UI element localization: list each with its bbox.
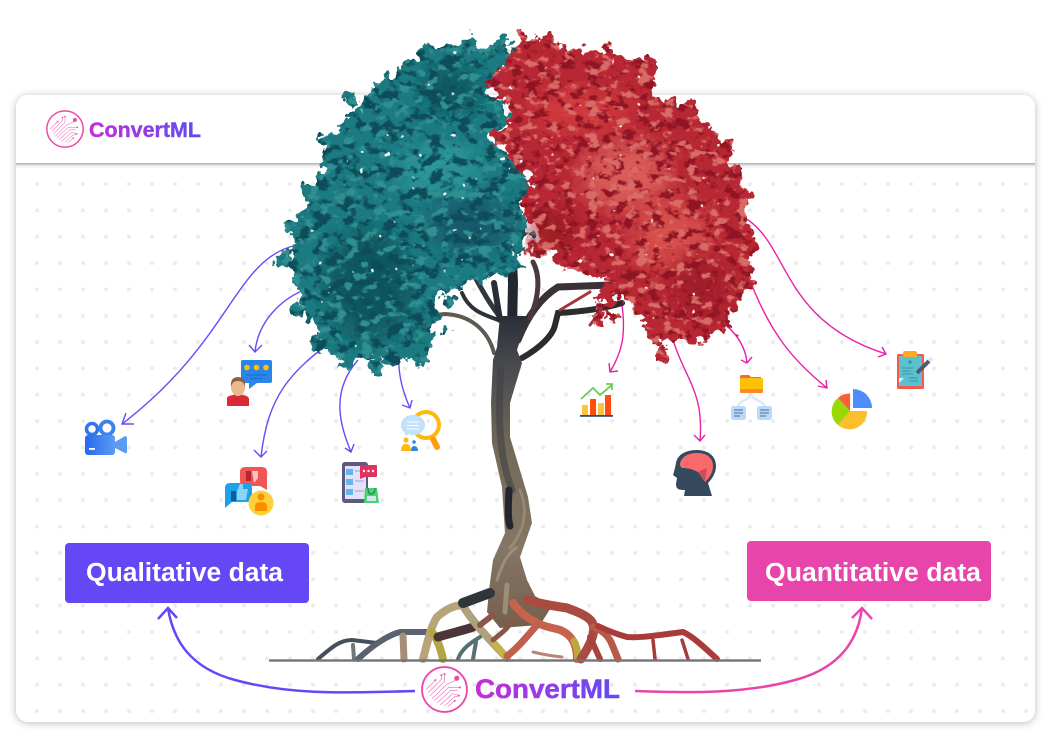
icon: folder tree [731,375,772,420]
qualitative data label: Qualitative data [86,559,284,587]
teal foliage [275,38,534,374]
icon: clipboard [897,351,932,389]
arrows from quantitative foliage to icons [609,218,886,441]
tree trunk [487,316,552,628]
header logo: ConvertML [89,119,201,142]
roots [318,593,717,659]
arrows from qualitative foliage to icons [122,245,412,457]
ground line [269,659,761,662]
trunk shading [497,370,524,612]
icon: likes and dislikes [225,467,274,516]
icon: phone survey [342,462,379,503]
icon: customer review [227,360,272,406]
header logo [47,111,201,147]
quantitative data label [747,541,991,601]
bottom centre logo: ConvertML [475,674,620,704]
icon: bar chart [580,384,613,417]
icon: brain head [673,450,716,496]
red foliage [488,28,759,361]
arrow: to quantitative data [635,608,872,692]
arrow: to qualitative data [158,608,415,692]
quantitative data label: Quantitative data [765,559,982,587]
tree branches [425,262,622,358]
icon: research magnifier [401,412,439,451]
bottom centre logo [422,667,620,712]
icon: pie chart [832,389,872,429]
qualitative data label [65,543,309,603]
icon: video camera [85,422,127,455]
tree [269,28,761,662]
